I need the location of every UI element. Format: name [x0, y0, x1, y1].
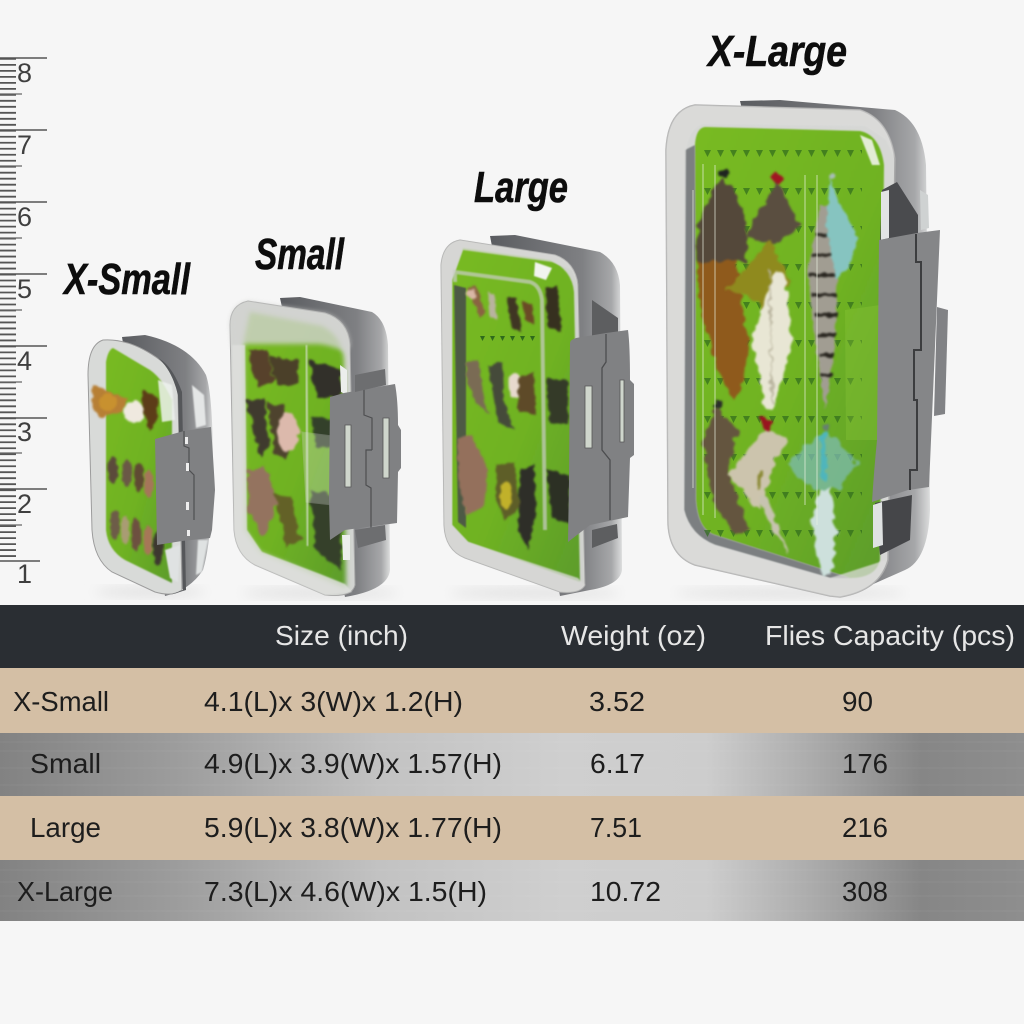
fly: red head with yellow and white feathers [726, 172, 800, 410]
row: Small: 176 [842, 748, 888, 779]
row: X-Small: 4.1(L)x 3(W)x 1.2(H) [204, 686, 463, 717]
clear lid [441, 240, 585, 592]
table header: Size (inch) [275, 620, 408, 651]
dark inner edge [454, 285, 466, 528]
title: Large: Large [474, 163, 568, 212]
box: X-Large [666, 100, 948, 598]
green liner [106, 348, 172, 583]
latch [568, 330, 634, 542]
green liner [244, 312, 346, 588]
ruler: 2 [17, 489, 32, 519]
case back [490, 235, 622, 596]
table header: Flies Capacity (pcs) [765, 620, 1015, 651]
flies [458, 286, 570, 550]
row: Small: 4.9(L)x 3.9(W)x 1.57(H) [204, 748, 502, 779]
row: X-Small: X-Small [13, 686, 109, 717]
row: X-Large: 308 [842, 876, 888, 907]
fly: lower middle red head [728, 417, 790, 556]
box: Large [441, 235, 634, 598]
ruler [0, 58, 47, 589]
clear lid [230, 301, 355, 596]
upper hinge [592, 300, 618, 337]
latch [872, 230, 940, 502]
table header [0, 605, 1024, 668]
row: Large [0, 796, 1024, 860]
latch [155, 427, 215, 545]
highlight [158, 380, 175, 422]
upper hinge glints [192, 385, 206, 428]
fly: lower left brown [703, 400, 750, 535]
case back [740, 100, 930, 590]
latch slots [910, 234, 921, 490]
row: Large: Large [30, 812, 101, 843]
fly: striped and teal [808, 173, 858, 410]
row: X-Large: 7.3(L)x 4.6(W)x 1.5(H) [204, 876, 487, 907]
hinge glints [340, 365, 350, 560]
clear lid [666, 105, 895, 597]
box: Small [230, 297, 401, 598]
ruler: 6 [17, 202, 32, 232]
flies [246, 350, 342, 572]
title: Small: Small [255, 230, 345, 279]
case back [122, 335, 213, 596]
frosted lid [230, 301, 350, 352]
title: X-Small: X-Small [62, 255, 191, 304]
ruler: 8 [17, 58, 32, 88]
latch tab [934, 307, 948, 416]
clear lid [88, 340, 182, 594]
case back [280, 297, 390, 597]
fly: lower right teal [786, 425, 858, 578]
upper hinge detail [880, 182, 929, 242]
lower hinge [592, 524, 618, 548]
ruler: 5 [17, 274, 32, 304]
row: Large: 216 [842, 812, 888, 843]
row: Small [0, 733, 1024, 796]
latch [329, 384, 401, 540]
triangle holes [480, 335, 540, 345]
box: X-Small [88, 335, 215, 597]
row: Small: 6.17 [590, 748, 645, 779]
triangle holes [704, 148, 862, 568]
row: X-Large: X-Large [17, 876, 113, 907]
lid reflections [666, 105, 895, 597]
ruler: 4 [17, 346, 32, 376]
green liner [452, 248, 580, 582]
row: Large: 7.51 [590, 812, 642, 843]
table header: Weight (oz) [561, 620, 706, 651]
row: Small: Small [30, 748, 101, 779]
row: X-Large: 10.72 [590, 876, 661, 907]
lower hinge detail [873, 495, 912, 555]
ruler: 7 [17, 130, 32, 160]
ruler: 1 [17, 559, 32, 589]
frosted lid [441, 240, 585, 592]
row: Large: 5.9(L)x 3.8(W)x 1.77(H) [204, 812, 502, 843]
title: X-Large: X-Large [705, 27, 847, 76]
row: X-Small: 3.52 [589, 686, 645, 717]
lower hinge glints [165, 540, 208, 582]
row: X-Large [0, 860, 1024, 921]
row: X-Small [0, 668, 1024, 733]
flies [92, 385, 163, 565]
green liner [695, 127, 884, 578]
ruler: 3 [17, 417, 32, 447]
fly: brown and orange [696, 168, 748, 400]
row: X-Small: 90 [842, 686, 873, 717]
table [0, 605, 1024, 921]
